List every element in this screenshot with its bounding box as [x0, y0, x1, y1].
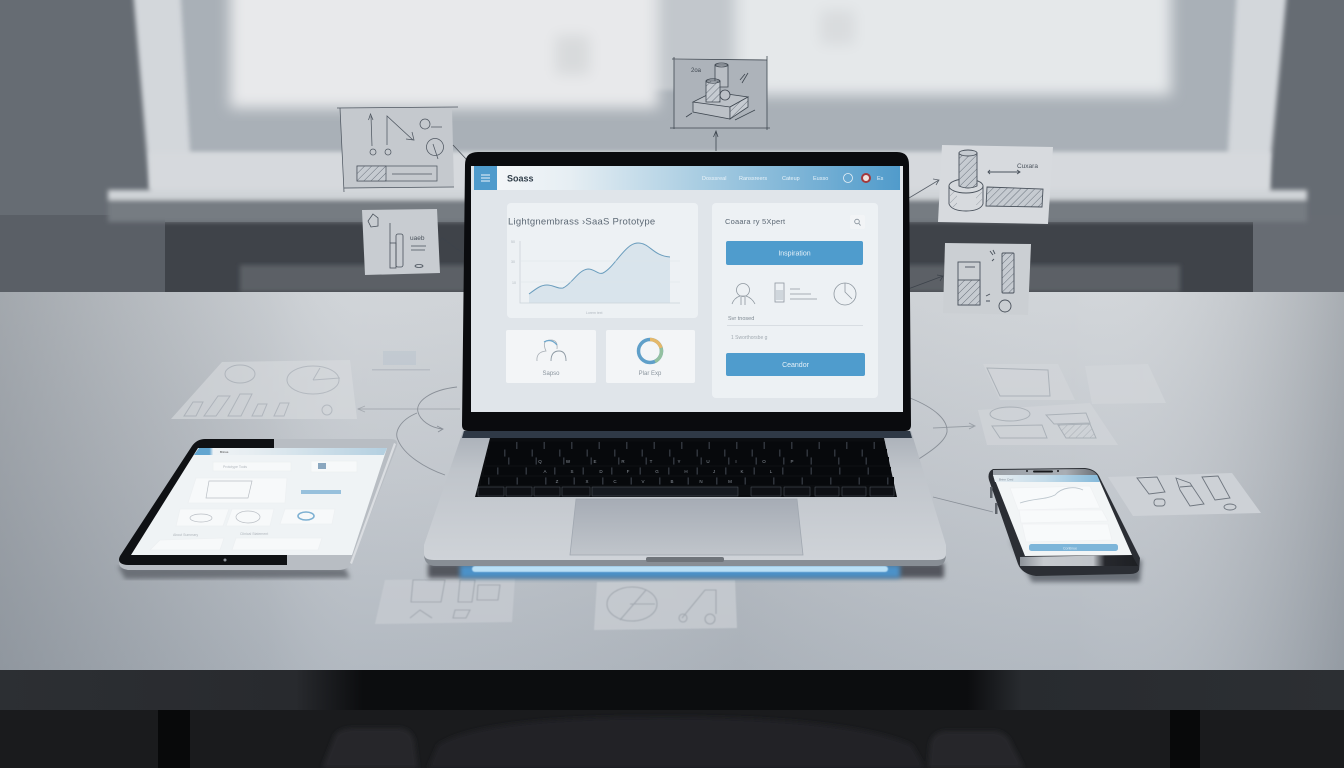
laptop keyboard: P: [790, 459, 794, 464]
icon: phone with lines: [775, 283, 817, 302]
laptop glow bar: [428, 563, 944, 578]
area chart: 50: [511, 240, 515, 244]
panel: right form card: [712, 203, 878, 398]
laptop keyboard: C: [613, 479, 617, 484]
laptop keyboard: K: [740, 469, 744, 474]
form field: [727, 316, 863, 341]
laptop keyboard: U: [706, 459, 710, 464]
laptop keyboard: B: [670, 479, 674, 484]
laptop keyboard: Q: [538, 459, 542, 464]
laptop keyboard: M: [728, 479, 732, 484]
laptop keyboard: I: [735, 459, 737, 464]
top bar navigation: Dosssreal: [702, 176, 726, 182]
panel: users card: Sapso: [542, 371, 560, 377]
chair back: [322, 717, 1024, 768]
area chart: [511, 240, 680, 315]
laptop keyboard: R: [621, 459, 625, 464]
phone device: Continue: [1063, 546, 1077, 550]
laptop keyboard: E: [593, 459, 597, 464]
floating sketch: cylinder and block: [909, 145, 1053, 224]
paper: wireframe sketches on desk right: [978, 364, 1166, 445]
laptop keyboard: T: [650, 459, 653, 464]
icon: person: [732, 284, 755, 305]
paper: device sketches on desk right: [1108, 473, 1261, 516]
top bar navigation: [702, 176, 884, 182]
window sill: [150, 152, 1270, 198]
panel: donut card: Plar Exp: [639, 371, 662, 377]
laptop device: [424, 152, 946, 578]
primary button: Inspiration: [778, 250, 811, 258]
top bar icons: [844, 173, 871, 183]
laptop keyboard: S: [570, 469, 574, 474]
floating sketch: tube note: [362, 209, 464, 275]
area chart: Lorem text: [586, 311, 603, 315]
laptop keyboard: Z: [556, 479, 559, 484]
laptop keyboard: A: [543, 469, 547, 474]
laptop keyboard: D: [599, 469, 603, 474]
laptop keyboard: [475, 438, 897, 497]
secondary button: Ceandor: [782, 362, 810, 369]
tablet device: [118, 439, 397, 579]
tablet top bar: [194, 448, 387, 455]
laptop screen: [471, 166, 903, 412]
floating sketch: cylinders on a block: 2oa: [691, 68, 702, 74]
background: room wall and window: [0, 0, 1344, 292]
desk: table top and front edge: [0, 292, 1344, 768]
tablet device: Brinss: [220, 450, 229, 454]
form heading: Coaara ry 5Xpert: [725, 217, 786, 226]
tablet device: About Summary: [173, 533, 198, 537]
top bar navigation: Es: [877, 176, 884, 182]
window panes: [230, 0, 658, 108]
papers: faint sketches below laptop: [375, 578, 737, 630]
top bar navigation: Ranssreers: [739, 176, 767, 182]
floating sketch: bars and circle: [908, 243, 1031, 315]
panel: chart card: [507, 203, 698, 318]
laptop keyboard: X: [585, 479, 589, 484]
floating sketch: cylinders on a block: [670, 56, 770, 151]
area chart: 10: [512, 281, 516, 285]
floating sketch: tube note: uaeb: [410, 235, 425, 242]
laptop keyboard: G: [655, 469, 659, 474]
tablet device: Clinical Statement: [240, 532, 268, 536]
laptop lid bezel: [462, 152, 911, 431]
top bar navigation: Eusso: [813, 176, 828, 182]
tablet device: Prototype Tools: [223, 465, 247, 469]
phone device: Brinn Cred: [999, 478, 1014, 482]
laptop keyboard: J: [713, 469, 715, 474]
panel: users card: [506, 330, 596, 383]
form field: 1 Sworthorsbe g: [731, 335, 768, 341]
laptop keyboard: H: [684, 469, 688, 474]
top bar navigation: Cateup: [782, 176, 800, 182]
icon: clock: [834, 283, 856, 305]
floating sketch: cylinder and block: Cuxara: [1017, 163, 1038, 170]
paper: faint chart sketch on desk: [171, 351, 430, 419]
form field: Svr tnosed: [728, 316, 754, 322]
primary button: [726, 241, 863, 265]
phone shadow: [1010, 540, 1142, 582]
secondary button: [726, 353, 865, 376]
menu button: [474, 166, 497, 190]
window frame: [133, 0, 1287, 190]
laptop keyboard: W: [566, 459, 571, 464]
panel: donut card: [606, 330, 695, 383]
search icon: [850, 215, 865, 229]
tablet shadow: [118, 566, 350, 579]
chart title: Lightgnembrass ›SaaS Prototype: [508, 216, 655, 228]
phone device: [988, 468, 1142, 582]
laptop keyboard: L: [770, 469, 773, 474]
floating sketch: arrows and gauge: [337, 107, 467, 192]
donut chart: [638, 340, 662, 362]
top bar brand: Soass: [507, 174, 534, 184]
connector arcs and arrows on desk: [358, 387, 993, 512]
laptop base: [424, 431, 946, 566]
laptop keyboard: Y: [677, 459, 681, 464]
laptop keyboard: V: [641, 479, 645, 484]
area chart: 30: [511, 260, 515, 264]
laptop keyboard: F: [627, 469, 630, 474]
laptop keyboard: O: [762, 459, 766, 464]
laptop keyboard: N: [699, 479, 703, 484]
